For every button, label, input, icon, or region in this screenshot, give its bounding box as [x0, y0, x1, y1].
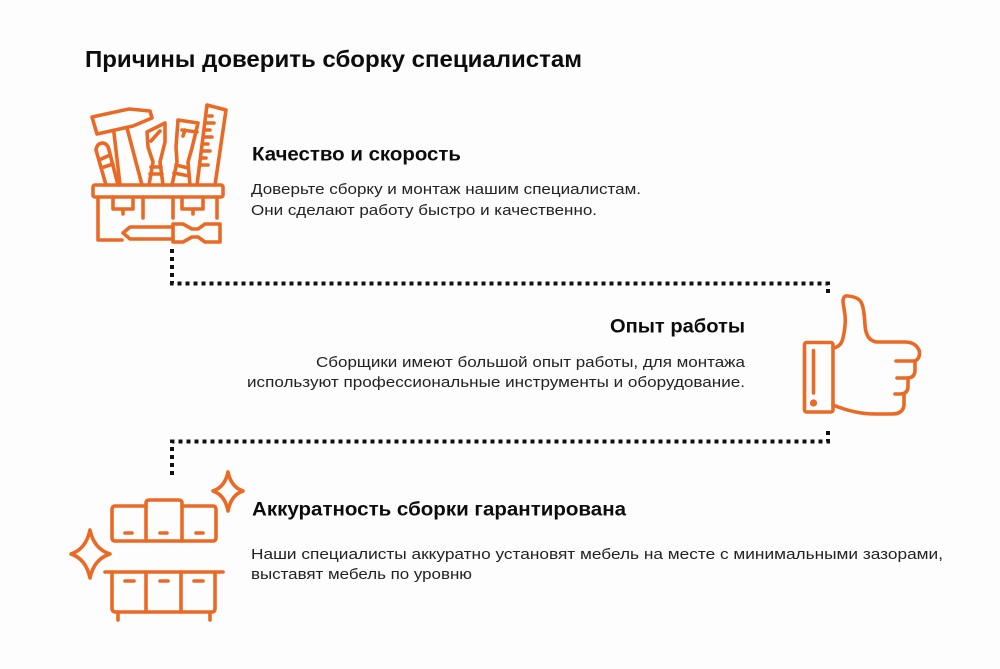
icon: toolbox with tools: [92, 105, 226, 242]
text: assembly accuracy line 2: выставят мебель по уровню: [251, 566, 472, 583]
connector: dotted line from thumb to cabinets: [172, 431, 828, 479]
text: quality and speed line 2: Они сделают работу быстро и качественно.: [251, 202, 597, 219]
icon: thumbs up: [804, 296, 920, 414]
heading: assembly accuracy: Аккуратность сборки гарантирована: [252, 500, 626, 520]
heading: quality and speed: Качество и скорость: [252, 144, 461, 166]
text: experience line 1: Сборщики имеют большой опыт работы, для монтажа: [316, 354, 746, 371]
title: Причины доверить сборку специалистам: [85, 46, 582, 72]
heading: experience: Опыт работы: [610, 316, 745, 338]
text: experience line 2: используют профессиональные инструменты и оборудование.: [247, 374, 745, 391]
text: quality and speed line 1: Доверьте сборку и монтаж нашим специалистам.: [251, 181, 641, 198]
connector: dotted line from tools to thumb: [172, 249, 828, 296]
text: assembly accuracy line 1: Наши специалисты аккуратно установят мебель на месте с минимальными зазорами,: [251, 546, 943, 563]
icon: sparkling kitchen cabinets: [71, 472, 243, 620]
